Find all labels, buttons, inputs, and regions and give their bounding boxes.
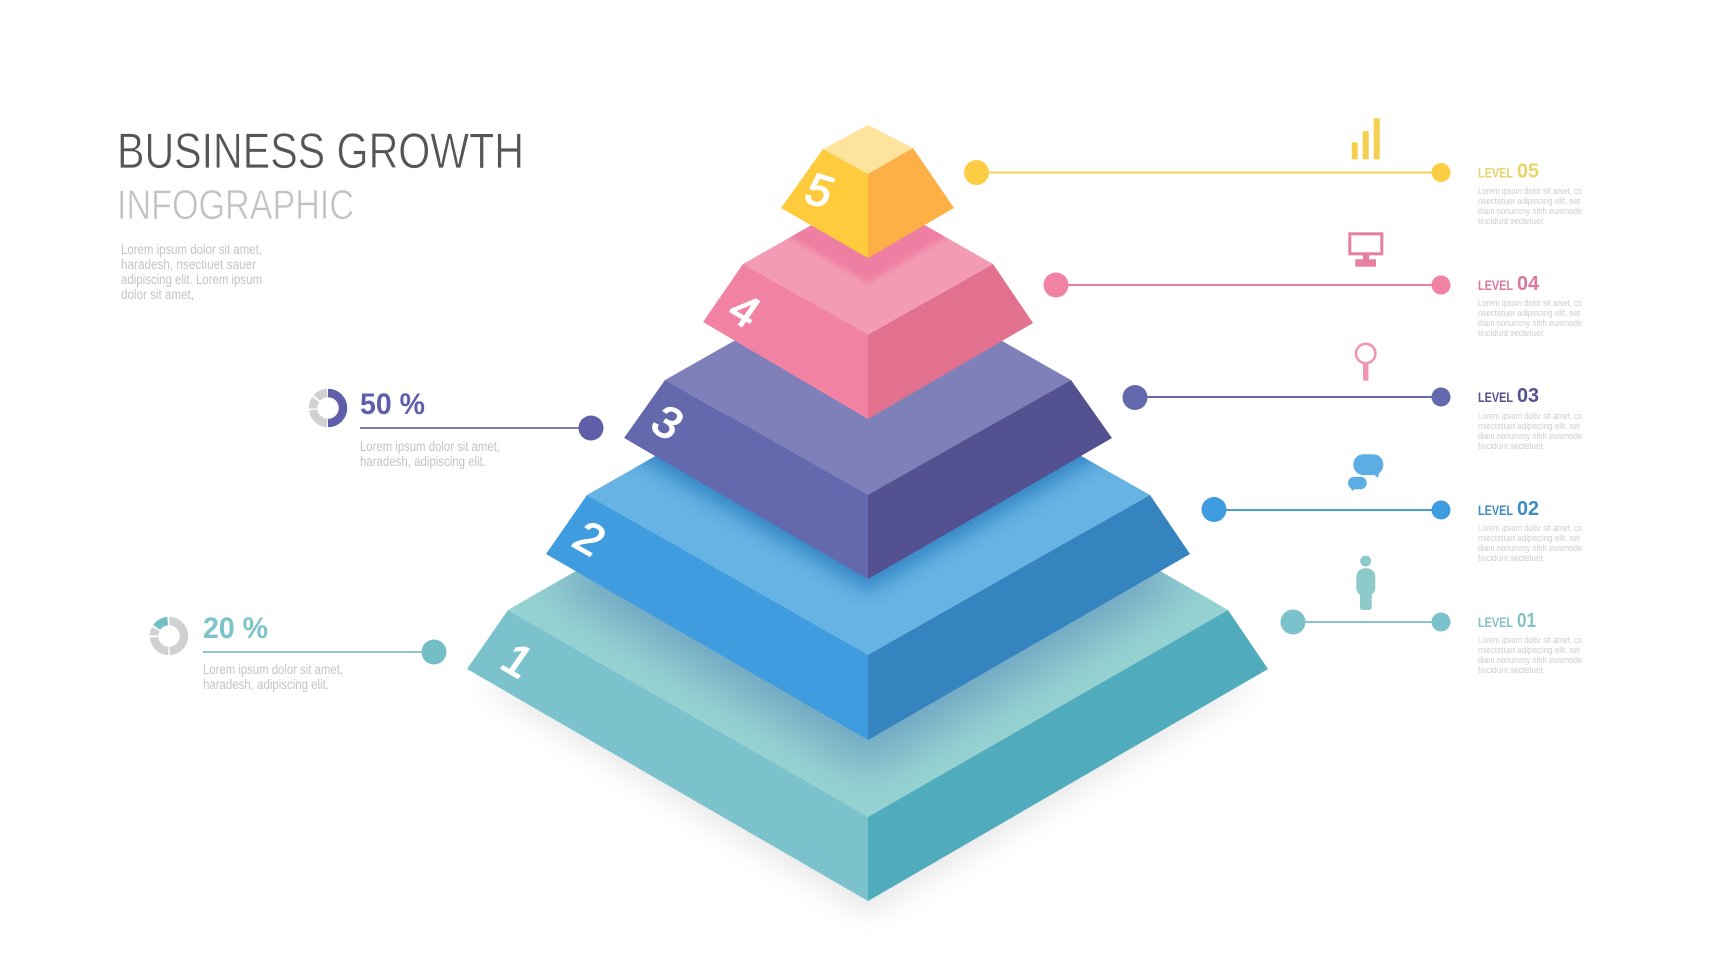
callout: 50 percent: Lorem ipsum dolor sit amet, bbox=[360, 439, 500, 454]
label: level 05: Lorem ipsum dolor sit amet, co bbox=[1478, 186, 1582, 197]
label: level 01: Lorem ipsum dolor sit amet, co bbox=[1478, 635, 1582, 646]
label: level 05: nsectetuer adipiscing elit, set bbox=[1478, 196, 1580, 207]
title: BUSINESS GROWTH bbox=[117, 123, 524, 179]
intro text block: adipiscing elit. Lorem ipsum bbox=[121, 272, 262, 287]
callout: 20 percent bbox=[154, 612, 446, 692]
callout: 50 percent bbox=[313, 388, 604, 469]
label: level 02: nsectetuer adipiscing elit, set bbox=[1478, 533, 1580, 544]
icon: magnifier bbox=[1356, 344, 1375, 381]
label: level 03: diam nonummy nibh euismode bbox=[1478, 431, 1582, 442]
label: level 03 bbox=[1478, 385, 1582, 452]
label: level 04: 04 bbox=[1517, 273, 1540, 295]
label: level 01: nsectetuer adipiscing elit, set bbox=[1478, 645, 1580, 656]
label: level 05: diam nonummy nibh euismode bbox=[1478, 206, 1582, 217]
tier 4: 4 bbox=[719, 283, 770, 338]
tier 1 bbox=[467, 530, 1268, 901]
callout: 20 percent: Lorem ipsum dolor sit amet, bbox=[203, 662, 343, 677]
intro text block: haradesh, nsectiuet sauer bbox=[121, 257, 256, 272]
label: level 02: Lorem ipsum dolor sit amet, co bbox=[1478, 523, 1582, 534]
callout: 50 percent: 50 % bbox=[360, 388, 425, 421]
label: level 05: tincidunt sectetuer. bbox=[1478, 216, 1545, 227]
label: level 02: LEVEL bbox=[1478, 502, 1513, 518]
label: level 02: diam nonummy nibh euismode bbox=[1478, 543, 1582, 554]
connector: level 04 bbox=[1044, 272, 1450, 298]
connector: level 05 bbox=[964, 160, 1450, 185]
intro text block: Lorem ipsum dolor sit amet, bbox=[121, 242, 262, 257]
tier 2 bbox=[546, 415, 1190, 740]
label: level 01: tincidunt sectetuer. bbox=[1478, 665, 1545, 676]
label: level 01 bbox=[1478, 610, 1582, 676]
icon: person bbox=[1356, 556, 1375, 610]
callout: 20 percent: haradesh, adipiscing elit. bbox=[203, 677, 329, 692]
label: level 03: LEVEL bbox=[1478, 389, 1513, 405]
icon: monitor bbox=[1350, 234, 1382, 267]
label: level 01: LEVEL bbox=[1478, 614, 1513, 630]
label: level 03: tincidunt sectetuer. bbox=[1478, 441, 1545, 452]
label: level 04 bbox=[1478, 273, 1582, 339]
label: level 02: tincidunt sectetuer. bbox=[1478, 553, 1545, 564]
label: level 03: nsectetuer adipiscing elit, set bbox=[1478, 421, 1580, 432]
connector: level 03 bbox=[1122, 385, 1450, 410]
label: level 04: tincidunt sectetuer. bbox=[1478, 328, 1545, 339]
tier 3: 3 bbox=[642, 395, 693, 450]
label: level 03: 03 bbox=[1517, 385, 1539, 407]
intro text block: dolor sit amet, bbox=[121, 287, 194, 302]
tier 2: 2 bbox=[564, 511, 615, 566]
label: level 05 bbox=[1478, 160, 1582, 227]
title: INFOGRAPHIC bbox=[117, 181, 354, 228]
label: level 01: diam nonummy nibh euismode bbox=[1478, 655, 1582, 666]
tier 5: 5 bbox=[798, 163, 842, 218]
connector: level 02 bbox=[1202, 497, 1450, 522]
label: level 04: Lorem ipsum dolor sit amet, co bbox=[1478, 298, 1582, 309]
label: level 03: Lorem ipsum dolor sit amet, co bbox=[1478, 411, 1582, 422]
label: level 05: 05 bbox=[1517, 160, 1539, 182]
callout: 50 percent: haradesh, adipiscing elit. bbox=[360, 454, 486, 469]
label: level 04: LEVEL bbox=[1478, 277, 1513, 293]
tier 5 bbox=[781, 125, 954, 258]
label: level 04: diam nonummy nibh euismode bbox=[1478, 318, 1582, 329]
label: level 02: 02 bbox=[1517, 498, 1539, 520]
label: level 05: LEVEL bbox=[1478, 164, 1513, 180]
tier 4 bbox=[703, 225, 1033, 419]
icon: 50 percent donut bbox=[313, 393, 343, 423]
title bbox=[117, 123, 524, 228]
intro text block bbox=[121, 242, 262, 302]
pyramid bbox=[467, 125, 1268, 915]
connector: level 01 bbox=[1280, 610, 1450, 634]
icon: 20 percent donut bbox=[154, 621, 184, 651]
label: level 04: nsectetuer adipiscing elit, set bbox=[1478, 308, 1580, 319]
tier 1: 1 bbox=[492, 633, 543, 688]
icon: speech bubbles bbox=[1348, 454, 1383, 491]
ground shadow bbox=[480, 640, 1256, 915]
callout: 20 percent: 20 % bbox=[203, 612, 268, 645]
tier 3 bbox=[624, 265, 1112, 579]
label: level 02 bbox=[1478, 498, 1582, 564]
icon: bar chart bbox=[1352, 118, 1380, 159]
label: level 01: 01 bbox=[1517, 610, 1536, 632]
